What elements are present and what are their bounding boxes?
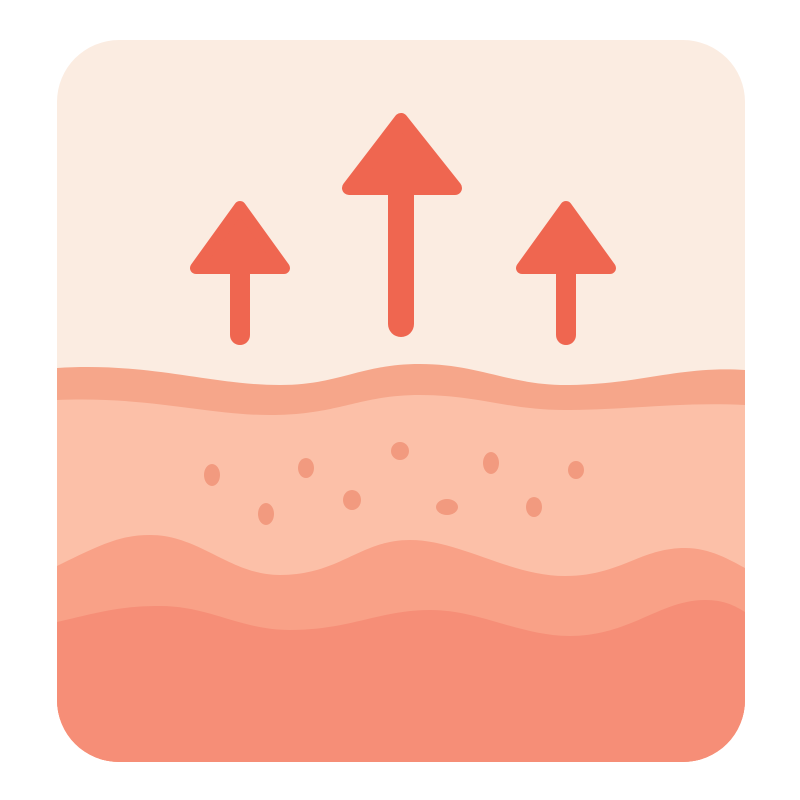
skin layer: bottom: [57, 600, 745, 762]
dots: pores: [204, 442, 584, 525]
icon: skin layers with upward arrows: [57, 40, 745, 762]
arrow: left: [196, 207, 284, 335]
arrow: right: [522, 207, 610, 335]
skin layer: top band: [57, 364, 745, 800]
skin layer: lower band: [57, 535, 745, 762]
skin layer: dermis: [57, 395, 745, 576]
arrow: center: [349, 120, 455, 324]
